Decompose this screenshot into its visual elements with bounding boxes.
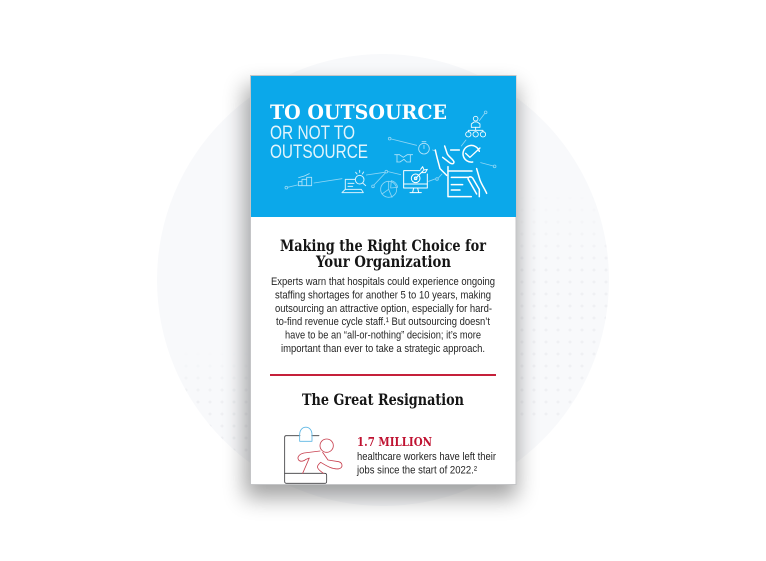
divider bbox=[270, 374, 496, 376]
text block: intro paragraph: outsourcing an attractive option, especially for hard- bbox=[275, 303, 492, 315]
title: OR NOT TO bbox=[270, 122, 355, 144]
icon: bar chart bbox=[298, 174, 312, 186]
title: OUTSOURCE bbox=[270, 141, 368, 163]
text block: intro paragraph bbox=[271, 276, 495, 355]
heading: making the right choice: Making the Right Choice for bbox=[280, 236, 487, 255]
heading: the great resignation: The Great Resignation bbox=[302, 390, 464, 409]
text block: intro paragraph: important than ever to take a strategic approach. bbox=[281, 343, 485, 355]
heading: making the right choice: Your Organization bbox=[315, 252, 451, 271]
title: TO OUTSOURCE bbox=[270, 100, 447, 124]
icon: stopwatch bbox=[419, 142, 429, 154]
dotted texture bbox=[180, 190, 620, 480]
icon: pie chart bbox=[381, 181, 398, 197]
stat: 1.7 million: jobs since the start of 2022.² bbox=[356, 464, 477, 476]
panel: infographic card bbox=[250, 76, 516, 484]
icon: connecting lines bbox=[285, 111, 496, 189]
stat: 1.7 million: healthcare workers have left their bbox=[357, 451, 496, 463]
stat: 1.7 million bbox=[356, 434, 496, 476]
icon: person running out of door bbox=[285, 427, 342, 483]
card shadow bbox=[245, 86, 517, 498]
heading: making the right choice bbox=[280, 236, 487, 271]
icon: header line illustrations bbox=[285, 111, 496, 197]
text block: intro paragraph: have to be an “all-or-nothing” decision; it’s more bbox=[285, 330, 481, 342]
text block: intro paragraph: to-find revenue cycle staff.¹ But outsourcing doesn’t bbox=[276, 316, 490, 328]
icon: checklist held by hands bbox=[435, 146, 487, 197]
icon: check circle bbox=[451, 145, 480, 162]
background circle bbox=[157, 54, 609, 506]
text block: intro paragraph: staffing shortages for another 5 to 10 years, making bbox=[275, 290, 491, 302]
icon: monitor with target bbox=[404, 167, 427, 193]
icon: laptop and magnifier bbox=[342, 170, 366, 193]
icon: org chart bbox=[466, 116, 486, 137]
title bbox=[270, 100, 447, 163]
stat: 1.7 million: 1.7 MILLION bbox=[357, 434, 432, 449]
panel: blue header bbox=[251, 76, 516, 217]
text block: intro paragraph: Experts warn that hospitals could experience ongoing bbox=[271, 276, 495, 288]
icon: handshake bbox=[395, 155, 413, 162]
